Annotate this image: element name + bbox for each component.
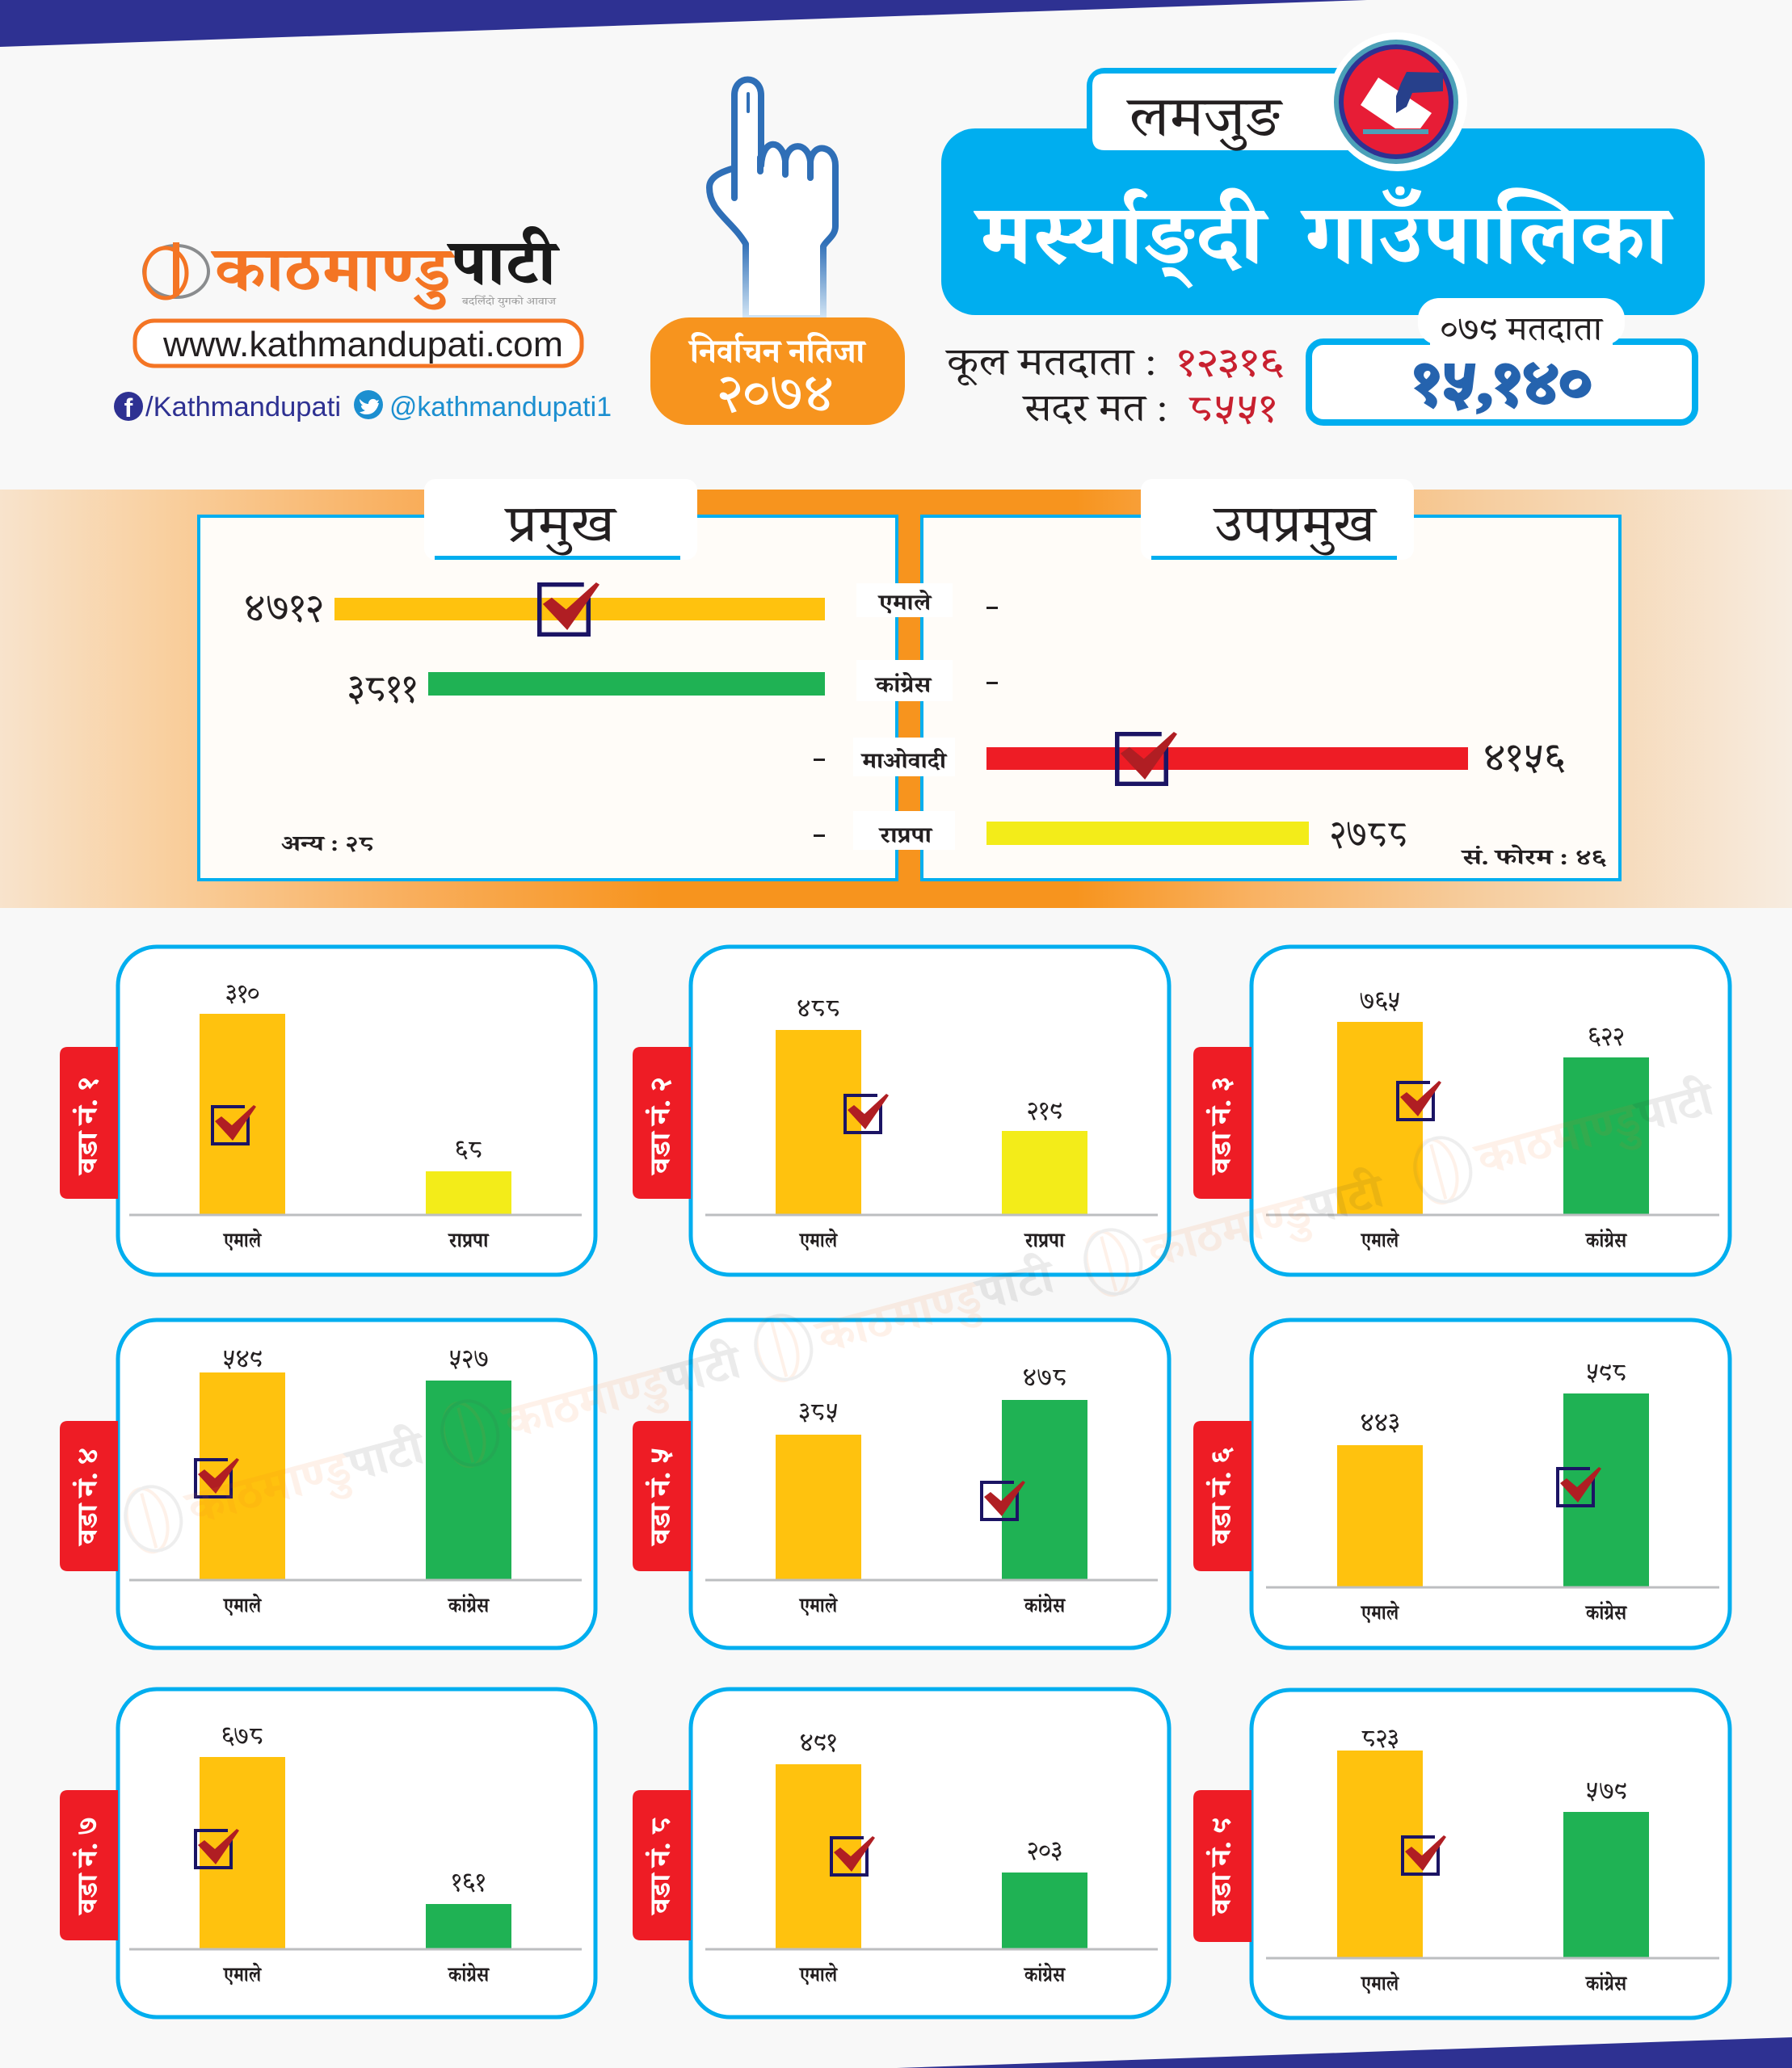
bar: UML 385: ३८५ [798,1397,839,1426]
bar: UML 491: ४९१ [800,1727,837,1756]
party labels: कांग्रेस [1584,1971,1628,1995]
top navy band [0,0,1367,47]
logo: Kathmandupati: बदलिँदो युगको आवाज [461,295,557,308]
ward 9 panel [1193,1690,1730,2018]
ward tag: वडा नं. २ [644,1077,676,1176]
ward 2 panel [633,947,1169,1275]
party labels: एमाले [222,1593,263,1617]
party label: Congress: कांग्रेस [874,671,932,698]
winner check [1117,732,1177,784]
facebook handle: f [124,393,133,422]
bar: UML 491 [776,1727,861,1948]
bar: Congress 527 [426,1343,511,1579]
party labels: कांग्रेस [1584,1228,1628,1252]
bar: Congress 478 [1002,1362,1087,1579]
winner check [212,1105,256,1144]
watermark logos: काठमाण्डुपाटी [495,1333,751,1456]
panel: upapramukh (deputy chief) [922,479,1620,880]
winner check [1398,1081,1441,1120]
ward tag: वडा नं. ३ [1205,1077,1237,1176]
bar: UML 310 [200,978,285,1214]
bar: UML 488: ४८८ [797,993,840,1022]
party labels: एमाले [1360,1971,1400,1995]
winner check [831,1836,875,1875]
ward tag [633,1421,691,1571]
party labels: एमाले [798,1228,839,1252]
party labels: एमाले [1360,1600,1400,1625]
party label: Maoist [853,738,955,776]
axis [705,1213,1158,1217]
party labels: राप्रपा [448,1229,490,1252]
bar: UML 443 [1337,1407,1423,1587]
ward 4 panel [60,1320,595,1648]
others: अन्य : २८ [281,831,374,855]
bar: Congress 527: ५२७ [448,1343,489,1372]
ward tag [60,1421,118,1571]
bottom navy band [897,2037,1792,2068]
bar: RPP 219: २१९ [1027,1095,1062,1124]
municipality name: मर्स्याङ्दी [974,188,1269,288]
watermark logos: काठमाण्डुपाटी [179,1419,434,1541]
facebook handle: /Kathmandupati [145,392,341,422]
bar: Congress 598 [1563,1357,1649,1587]
heading: upapramukh [1141,479,1414,560]
icon: voting hand with inked finger [709,79,835,318]
bar: RPP 2788 [986,813,1407,855]
winner check [1558,1467,1601,1506]
dash: Maoist [814,759,825,761]
axis [129,1213,582,1217]
party labels: कांग्रेस [1584,1600,1628,1625]
dash: Congress [986,682,998,684]
ward tag [1193,1421,1251,1571]
party labels [222,1228,490,1252]
party labels [1360,1971,1628,1995]
bar: Congress 622 [1563,1021,1649,1214]
party label: UML [856,583,953,617]
ward tag [633,1047,691,1199]
box: 2079 voters: ०७९ मतदाता [1441,311,1605,348]
party labels: कांग्रेस [447,1962,490,1986]
ward tag [60,1047,118,1199]
party labels: कांग्रेस [1023,1962,1066,1986]
ward tag: वडा नं. ९ [1205,1818,1237,1917]
bar: UML 310: ३१० [225,978,259,1007]
bar: Congress 203: २०३ [1027,1835,1062,1864]
ward tag: वडा नं. १ [71,1077,103,1176]
bar: UML 549: ५४९ [222,1343,263,1372]
box: 2079 voters: १५,१४० [1412,349,1592,417]
watermark logos [119,1066,1723,1557]
party labels [798,1593,1066,1617]
bar: Congress 3811 [347,667,825,710]
winner check [196,1458,239,1497]
watermark logos: काठमाण्डुपाटी [1138,1162,1394,1284]
ward tag [1193,1047,1251,1199]
winner check [1403,1835,1446,1874]
bar: UML 765 [1337,986,1423,1214]
ward tag: वडा नं. ८ [644,1817,676,1916]
bar: UML 678 [200,1721,285,1948]
logo: Kathmandupati [144,226,560,309]
heading: upapramukh: उपप्रमुख [1213,495,1378,556]
dash: RPP [814,834,825,837]
party label: RPP [853,811,955,850]
twitter handle: @kathmandupati1 [389,392,612,422]
bar: Congress 3811: ३८११ [347,667,418,710]
ward 6 panel [1193,1320,1730,1648]
party labels: एमाले [798,1593,839,1617]
panel: pramukh (chief) [199,479,897,880]
website url box: www.kathmandupati.com [162,325,563,364]
bar: UML 443: ४४३ [1360,1407,1400,1436]
party labels: एमाले [1360,1228,1400,1252]
ward 1 panel [60,947,595,1275]
party label: Congress [856,660,953,701]
party labels [798,1228,1066,1252]
icon: election emblem [1328,32,1467,171]
voter stats: total and valid: १२३१६ [1176,341,1284,384]
winner check [196,1829,239,1868]
badge: election result 2074 [650,317,905,425]
bar: Congress 161: १६१ [451,1867,486,1896]
bar: Congress 478: ४७८ [1023,1362,1066,1391]
bar: UML 4712: ४७१२ [244,586,324,629]
winner check [540,582,599,634]
ward tag: वडा नं. ७ [71,1817,103,1916]
party labels: एमाले [222,1962,263,1986]
bar: UML 4712 [244,586,825,629]
district name: लमजुङ [1126,86,1283,151]
party labels [222,1593,490,1617]
party label: RPP: राप्रपा [878,823,934,848]
watermark logos: काठमाण्डुपाटी [809,1247,1064,1370]
bar: Congress 203 [1002,1835,1087,1948]
logo: Kathmandupati: पाटी [447,226,560,299]
voter stats: total and valid: कूल मतदाता : [945,341,1157,386]
ward tag: वडा नं. ६ [1205,1447,1237,1547]
bar: RPP 219 [1002,1095,1087,1214]
title panel: municipality [941,68,1705,315]
bar: RPP 68: ६८ [455,1134,482,1163]
ward tag [633,1790,691,1940]
others: सं. फोरम : ४६ [1460,845,1607,869]
bar: UML 765: ७६५ [1360,986,1400,1015]
winner check [845,1094,889,1133]
bar: RPP 68 [426,1134,511,1214]
bar: UML 823: ८२३ [1361,1723,1399,1752]
box: 2079 voters [1309,298,1695,422]
bar: Maoist 4156 [986,736,1565,779]
party labels [222,1962,490,1986]
bar: UML 385 [776,1397,861,1579]
orange band [0,490,1792,908]
axis [1266,1957,1719,1960]
axis [1266,1213,1719,1217]
municipality name [974,186,1674,288]
ward tag [60,1790,118,1940]
bar: Congress 579 [1563,1776,1649,1957]
bar: Congress 161 [426,1867,511,1948]
watermark logos: काठमाण्डुपाटी [1468,1070,1723,1192]
ward 8 panel [633,1689,1169,2017]
axis [705,1948,1158,1950]
heading: pramukh: प्रमुख [504,495,617,556]
voter stats: total and valid [945,341,1284,430]
heading: pramukh [424,479,697,560]
party label: UML: एमाले [877,589,932,616]
voter stats: total and valid: ८५५१ [1188,387,1277,430]
axis [705,1578,1158,1582]
party labels: कांग्रेस [447,1593,490,1617]
ward 5 panel [633,1320,1169,1648]
party labels: राप्रपा [1024,1229,1066,1252]
party labels [1360,1228,1628,1252]
ward 3 panel [1193,947,1730,1275]
ward tag: वडा नं. ४ [71,1448,103,1547]
bar: RPP 2788: २७८८ [1330,813,1407,855]
municipality name: गाउँपालिका [1300,186,1674,282]
axis [129,1578,582,1582]
bar: Maoist 4156: ४१५६ [1483,736,1565,779]
bar: UML 678: ६७८ [221,1721,263,1750]
bar: UML 488 [776,993,861,1214]
ward 7 panel [60,1689,595,2017]
bar: UML 823 [1337,1723,1423,1957]
badge: election result 2074: २०७४ [717,364,834,422]
logo: Kathmandupati: काठमाण्डु [211,234,456,309]
party label: Maoist: माओवादी [860,747,949,774]
bar: Congress 579: ५७९ [1585,1776,1627,1805]
voter stats: total and valid: सदर मत : [1022,387,1168,430]
winner check [982,1481,1025,1519]
ward tag: वडा नं. ५ [644,1448,676,1547]
party labels: एमाले [222,1228,263,1252]
bar: Congress 622: ६२२ [1588,1021,1625,1050]
axis [1266,1587,1719,1588]
bar: UML 549 [200,1343,285,1579]
ward tag [1193,1790,1251,1942]
axis [129,1948,582,1950]
dash: UML [986,607,998,609]
party labels [798,1962,1066,1986]
party labels: एमाले [798,1962,839,1986]
party labels: कांग्रेस [1023,1593,1066,1617]
bar: Congress 598: ५९८ [1586,1357,1626,1386]
badge: election result 2074: निर्वाचन नतिजा [688,332,867,371]
party labels [1360,1600,1628,1625]
